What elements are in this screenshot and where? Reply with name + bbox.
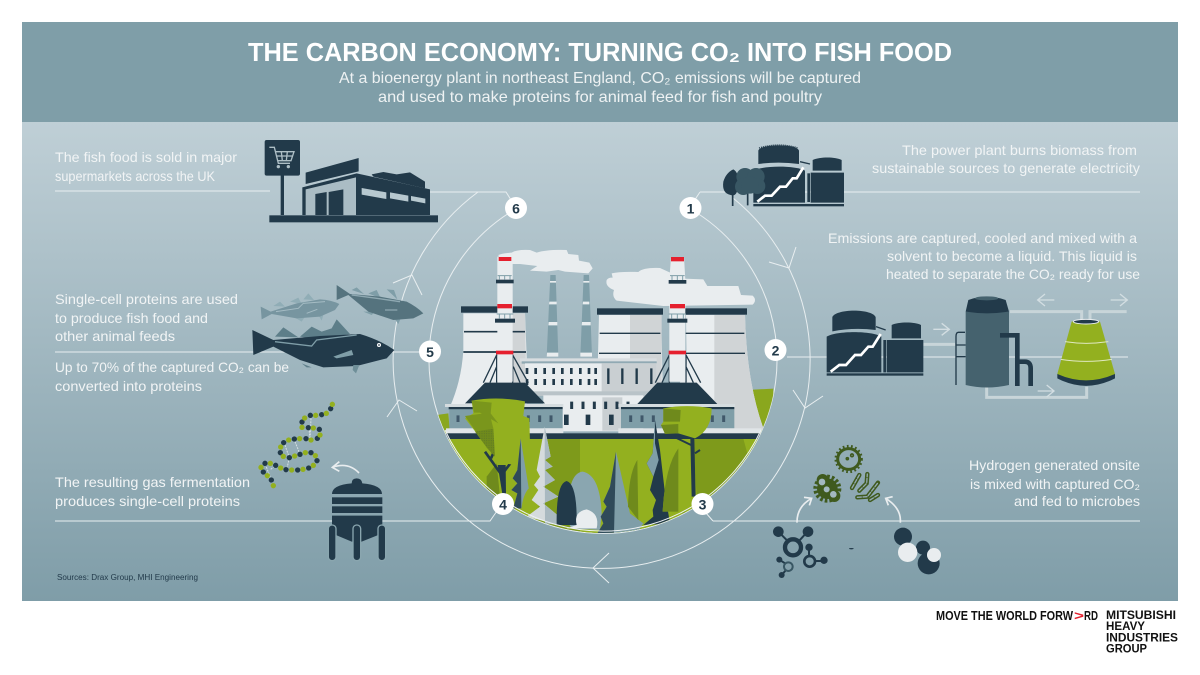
front fish [275, 319, 350, 367]
text: step 4 [55, 474, 250, 509]
thin chimneys [547, 275, 592, 357]
logo: company name [1106, 608, 1178, 656]
green cone [1057, 374, 1115, 386]
pipes [923, 312, 1127, 397]
icon: supermarket [265, 140, 438, 222]
molecule [773, 526, 828, 578]
text: step 3: and fed to microbes [1014, 493, 1140, 509]
smoke right [606, 268, 755, 306]
node 5 [419, 340, 441, 362]
cycle lines and rings [55, 191, 1140, 583]
logo: tagline: > [1074, 609, 1084, 623]
text: step 6: supermarkets across the UK [55, 168, 216, 184]
logo: company name: HEAVY [1106, 619, 1145, 633]
cooling tower right [680, 315, 763, 430]
node 3 [692, 493, 714, 515]
cooling tower middle [597, 315, 663, 410]
logo: tagline: RD [1084, 609, 1098, 623]
conifers [512, 438, 529, 508]
text: step 2: solvent to become a liquid. This liquid is [887, 248, 1137, 264]
left big tree [465, 398, 530, 494]
node 6 [505, 197, 527, 219]
subtitle: At a bioenergy plant in northeast England, CO₂ emissions will be captured [339, 70, 861, 87]
text: step 3: is mixed with captured CO₂ [970, 476, 1140, 492]
text: step 4: The resulting gas fermentation [55, 474, 250, 490]
rods [852, 474, 878, 500]
arrows [797, 497, 900, 523]
arrowheads [769, 247, 796, 268]
right wing block [618, 404, 735, 407]
back fish left [273, 293, 323, 322]
left stack and hopper [465, 383, 545, 403]
text: step 3 [969, 457, 1140, 509]
right stack and hopper [637, 383, 717, 404]
subtitle: and used to make proteins for animal feed for fish and poultry [378, 89, 822, 106]
text: step 2: Emissions are captured, cooled and mixed with a [828, 230, 1137, 246]
text: step 5: to produce fish food and [55, 310, 208, 326]
node 1 [680, 197, 702, 219]
back fish right [352, 287, 401, 324]
hydrogen [894, 528, 940, 574]
node 2 [764, 339, 786, 361]
icon: fermentation tank [328, 462, 386, 561]
node 6: 6 [512, 200, 520, 216]
ground [448, 438, 758, 533]
text: step 3: Hydrogen generated onsite [969, 457, 1140, 473]
tanks [832, 311, 876, 331]
left wing block [445, 404, 563, 407]
node 3: 3 [699, 496, 707, 512]
icon: DNA strand [258, 402, 335, 488]
text: step 2: heated to separate the CO₂ ready for use [886, 266, 1140, 282]
node 1: 1 [687, 200, 695, 216]
text: step 4: produces single-cell proteins [55, 493, 240, 509]
text: step 5: converted into proteins [55, 378, 202, 394]
logo: company name: INDUSTRIES [1106, 630, 1178, 644]
icon: capture process [827, 294, 1127, 397]
subtitle [339, 70, 861, 106]
scene rim [445, 430, 761, 531]
illustration: power plant scene [430, 250, 777, 539]
cooling tower left [450, 313, 527, 407]
text: step 5: Single-cell proteins are used [55, 291, 238, 307]
right tree [661, 406, 712, 497]
panel: header band [22, 22, 1178, 122]
column [966, 312, 1009, 387]
microbes [836, 447, 861, 471]
logo: company name: GROUP [1106, 642, 1147, 656]
main building [520, 358, 657, 362]
icon: storage tanks and trees [723, 145, 844, 206]
icon: fish [252, 285, 423, 373]
arrows [933, 294, 1127, 397]
text: step 6: The fish food is sold in major [55, 149, 237, 165]
windows [527, 368, 596, 385]
text: step 1 [872, 142, 1140, 176]
node 2: 2 [772, 342, 780, 358]
icon: microbes and molecules [773, 447, 941, 578]
panel: main background [22, 122, 1178, 601]
text: step 1: The power plant burns biomass from [902, 142, 1137, 158]
text: step 5: Up to 70% of the captured CO₂ can be [55, 359, 289, 375]
title: THE CARBON ECONOMY: TURNING CO₂ INTO FISH FOOD [248, 37, 952, 67]
text: step 5: other animal feeds [55, 328, 175, 344]
text: step 1: sustainable sources to generate electricity [872, 160, 1140, 176]
logo: tagline: MOVE THE WORLD FORW [936, 609, 1073, 623]
node 4 [492, 493, 514, 515]
back grass [437, 389, 773, 433]
node 4: 4 [499, 496, 507, 512]
text: step 5 [55, 291, 289, 394]
text: step 2 [828, 230, 1140, 282]
logo: company name: MITSUBISHI [1106, 608, 1176, 622]
node 5: 5 [426, 344, 434, 360]
sources: Sources: Drax Group, MHI Engineering [57, 573, 198, 582]
smoke left [498, 250, 593, 273]
text: step 6 [55, 149, 237, 184]
